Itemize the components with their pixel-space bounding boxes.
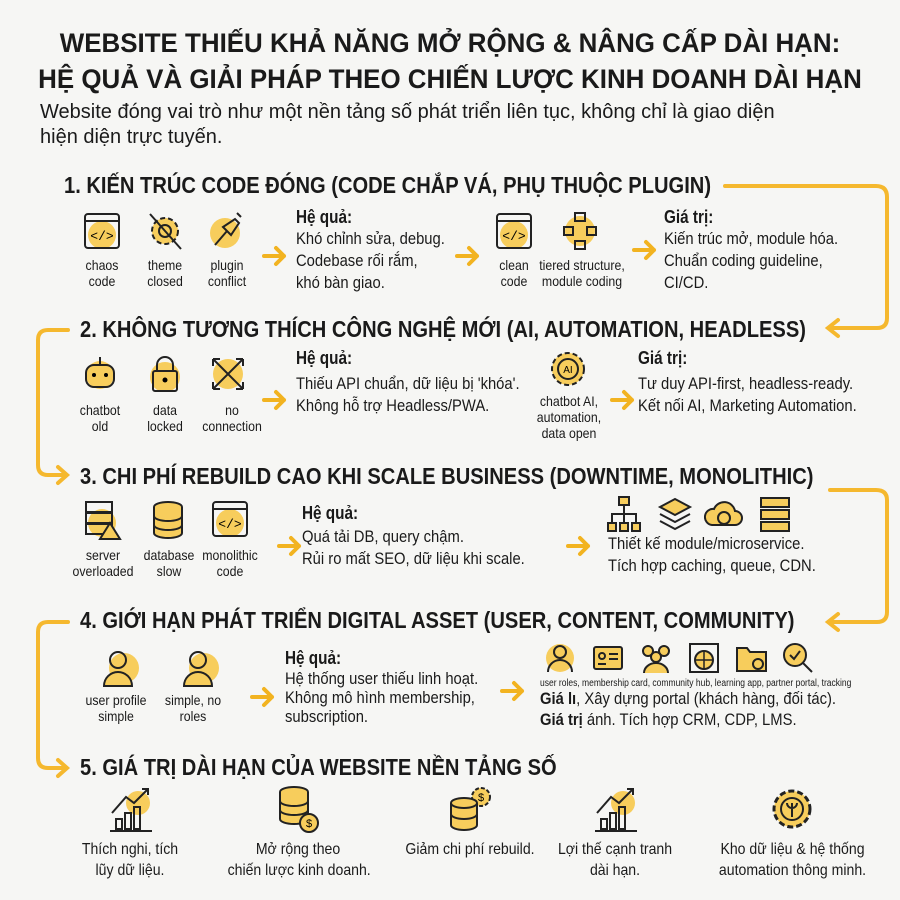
section 2 row: chatbot AI, xyxy=(540,393,598,409)
icon: chaos code xyxy=(84,213,120,249)
item 4: Lợi thế cạnh tranh xyxy=(558,841,672,858)
consequence: Khó chỉnh sửa, debug. xyxy=(296,229,445,248)
value: Giá trị: xyxy=(638,348,687,368)
section 2 row: chatbot xyxy=(80,402,120,418)
icon: server xyxy=(85,501,122,540)
section 1 row: clean xyxy=(499,257,529,273)
icon: lock xyxy=(150,356,180,392)
value: CI/CD. xyxy=(664,273,708,292)
consequence: Không hỗ trợ Headless/PWA. xyxy=(296,396,489,415)
icon: module xyxy=(563,212,597,250)
solution text: Thiết kế module/microservice. xyxy=(608,534,804,553)
consequence: Codebase rối rắm, xyxy=(296,251,418,270)
consequence: Không mô hình membership, xyxy=(285,688,475,707)
value: Chuẩn coding guideline, xyxy=(664,251,823,270)
item 4: dài hạn. xyxy=(590,862,640,879)
consequence: Hệ quả: xyxy=(285,648,341,668)
icon: chaos code: </> xyxy=(90,229,114,244)
subtitle: Website đóng vai trò như một nền tảng số phát triển liên tục, không chỉ là giao diện hiện diện trực tuyến. xyxy=(40,101,775,148)
consequence: Quá tải DB, query chậm. xyxy=(302,527,464,546)
item 1 xyxy=(60,785,200,880)
section 3 row: database xyxy=(144,547,194,563)
text: HỆ QUẢ VÀ GIẢI PHÁP THEO CHIẾN LƯỢC KINH DOANH DÀI HẠN xyxy=(38,64,862,94)
consequence xyxy=(296,348,520,415)
item 2: $ xyxy=(306,818,312,830)
section 2 row xyxy=(80,348,857,441)
item 3: Giảm chi phí rebuild. xyxy=(405,841,535,858)
section 1 row: code xyxy=(501,273,527,289)
value: Kết nối AI, Marketing Automation. xyxy=(638,396,857,415)
section 5 items xyxy=(82,786,866,879)
section 3 row: code xyxy=(217,563,243,579)
consequence: subscription. xyxy=(285,707,368,726)
solution text: Tích hợp caching, queue, CDN. xyxy=(608,556,816,575)
consequence xyxy=(302,503,525,568)
section 2 row: no xyxy=(225,402,239,418)
section 1 row: conflict xyxy=(208,273,246,289)
section 4 row: simple xyxy=(98,708,134,724)
item 5: Kho dữ liệu & hệ thống xyxy=(720,841,865,858)
consequence: Hệ thống user thiếu linh hoạt. xyxy=(285,669,478,688)
icon: plugin conflict xyxy=(210,212,242,248)
arrow xyxy=(277,536,302,556)
value xyxy=(540,689,836,729)
text: WEBSITE THIẾU KHẢ NĂNG MỞ RỘNG & NÂNG CẤP DÀI HẠN: xyxy=(60,28,840,58)
arrow xyxy=(455,246,480,266)
arrow xyxy=(566,536,590,556)
icon: clean code xyxy=(496,213,532,249)
section 1 row xyxy=(84,207,838,292)
consequence: Hệ quả: xyxy=(302,503,358,523)
consequence: Rủi ro mất SEO, dữ liệu khi scale. xyxy=(302,549,525,568)
section 4 row xyxy=(86,643,851,729)
section 2 row: data xyxy=(153,402,177,418)
section 2 row: automation, xyxy=(537,409,601,425)
solution icons xyxy=(546,643,813,673)
arrow xyxy=(632,240,656,260)
value: Giá lı, Xây dựng portal (khách hàng, đối tác). xyxy=(540,689,836,708)
icon: AI xyxy=(551,352,585,386)
icon: chatbot xyxy=(85,357,115,389)
item 2: Mở rộng theo xyxy=(256,841,340,858)
title xyxy=(38,28,862,94)
section 3 row: monolithic xyxy=(202,547,258,563)
arrow xyxy=(250,686,274,708)
value: Giá trị: xyxy=(664,207,713,227)
consequence: Hệ quả: xyxy=(296,348,352,368)
item 3: $ xyxy=(478,792,484,804)
icon: no connection xyxy=(212,358,244,390)
item 5: automation thông minh. xyxy=(719,862,866,879)
section 1 row: tiered structure, xyxy=(539,257,625,273)
value: Giá trị ánh. Tích hợp CRM, CDP, LMS. xyxy=(540,710,797,729)
section 1 row: plugin xyxy=(211,257,243,273)
item 2: chiến lược kinh doanh. xyxy=(228,862,371,879)
section 4 heading: 4. GIỚI HẠN PHÁT TRIỂN DIGITAL ASSET (USER, CONTENT, COMMUNITY) xyxy=(80,607,794,633)
section 1 heading: 1. KIẾN TRÚC CODE ĐÓNG (CODE CHẮP VÁ, PHỤ THUỘC PLUGIN) xyxy=(64,172,711,198)
value xyxy=(638,348,857,415)
item 2 xyxy=(218,785,378,880)
item 4 xyxy=(545,785,685,880)
item 3 xyxy=(395,785,545,880)
section 4 row: user roles, membership card, community hub, learning app, partner portal, tracking xyxy=(540,678,851,689)
solution text xyxy=(608,534,816,575)
icon: user simple xyxy=(183,651,219,687)
section 4 row: user profile xyxy=(86,692,146,708)
icon: monolithic code xyxy=(212,501,248,537)
value: Kiến trúc mở, module hóa. xyxy=(664,229,838,248)
item 1: lũy dữ liệu. xyxy=(96,862,164,879)
item 1: Thích nghi, tích xyxy=(82,841,178,858)
consequence: Thiếu API chuẩn, dữ liệu bị 'khóa'. xyxy=(296,374,520,393)
section 2 row: locked xyxy=(147,418,183,434)
icon: theme closed xyxy=(149,213,182,250)
labels: code xyxy=(89,273,115,289)
section 1 row: module coding xyxy=(542,273,622,289)
consequence xyxy=(296,207,445,292)
consequence: khó bàn giao. xyxy=(296,273,385,292)
labels: chaos xyxy=(86,257,118,273)
icon: user profile xyxy=(103,651,139,687)
section 4 row: roles xyxy=(180,708,206,724)
section 3 row: server xyxy=(86,547,120,563)
section 5 heading: 5. GIÁ TRỊ DÀI HẠN CỦA WEBSITE NỀN TẢNG SỐ xyxy=(80,754,557,780)
section 2 row: data open xyxy=(542,425,596,441)
labels xyxy=(86,257,118,289)
value: Tư duy API-first, headless-ready. xyxy=(638,374,853,393)
consequence: Hệ quả: xyxy=(296,207,352,227)
section 3 heading: 3. CHI PHÍ REBUILD CAO KHI SCALE BUSINESS (DOWNTIME, MONOLITHIC) xyxy=(80,463,813,489)
icon: clean code: </> xyxy=(502,229,526,244)
consequence xyxy=(285,648,478,726)
section 3 row: overloaded xyxy=(73,563,133,579)
section 3 row xyxy=(73,496,816,579)
section 4 row: simple, no xyxy=(165,692,221,708)
section 1 row: closed xyxy=(147,273,183,289)
section 1 row: theme xyxy=(148,257,182,273)
item 5 xyxy=(705,785,880,880)
section 2 row: old xyxy=(92,418,108,434)
section 2 heading: 2. KHÔNG TƯƠNG THÍCH CÔNG NGHỆ MỚI (AI, AUTOMATION, HEADLESS) xyxy=(80,316,806,342)
arrow xyxy=(262,390,286,410)
arrow xyxy=(500,680,524,702)
icon: AI: AI xyxy=(563,365,573,376)
solution icons xyxy=(607,496,790,532)
value xyxy=(664,207,838,292)
icon: database xyxy=(153,501,183,539)
section 3 row: slow xyxy=(157,563,181,579)
icon: monolithic code: </> xyxy=(218,517,242,532)
arrow xyxy=(610,390,634,410)
arrow xyxy=(262,246,286,266)
section 2 row: connection xyxy=(202,418,262,434)
